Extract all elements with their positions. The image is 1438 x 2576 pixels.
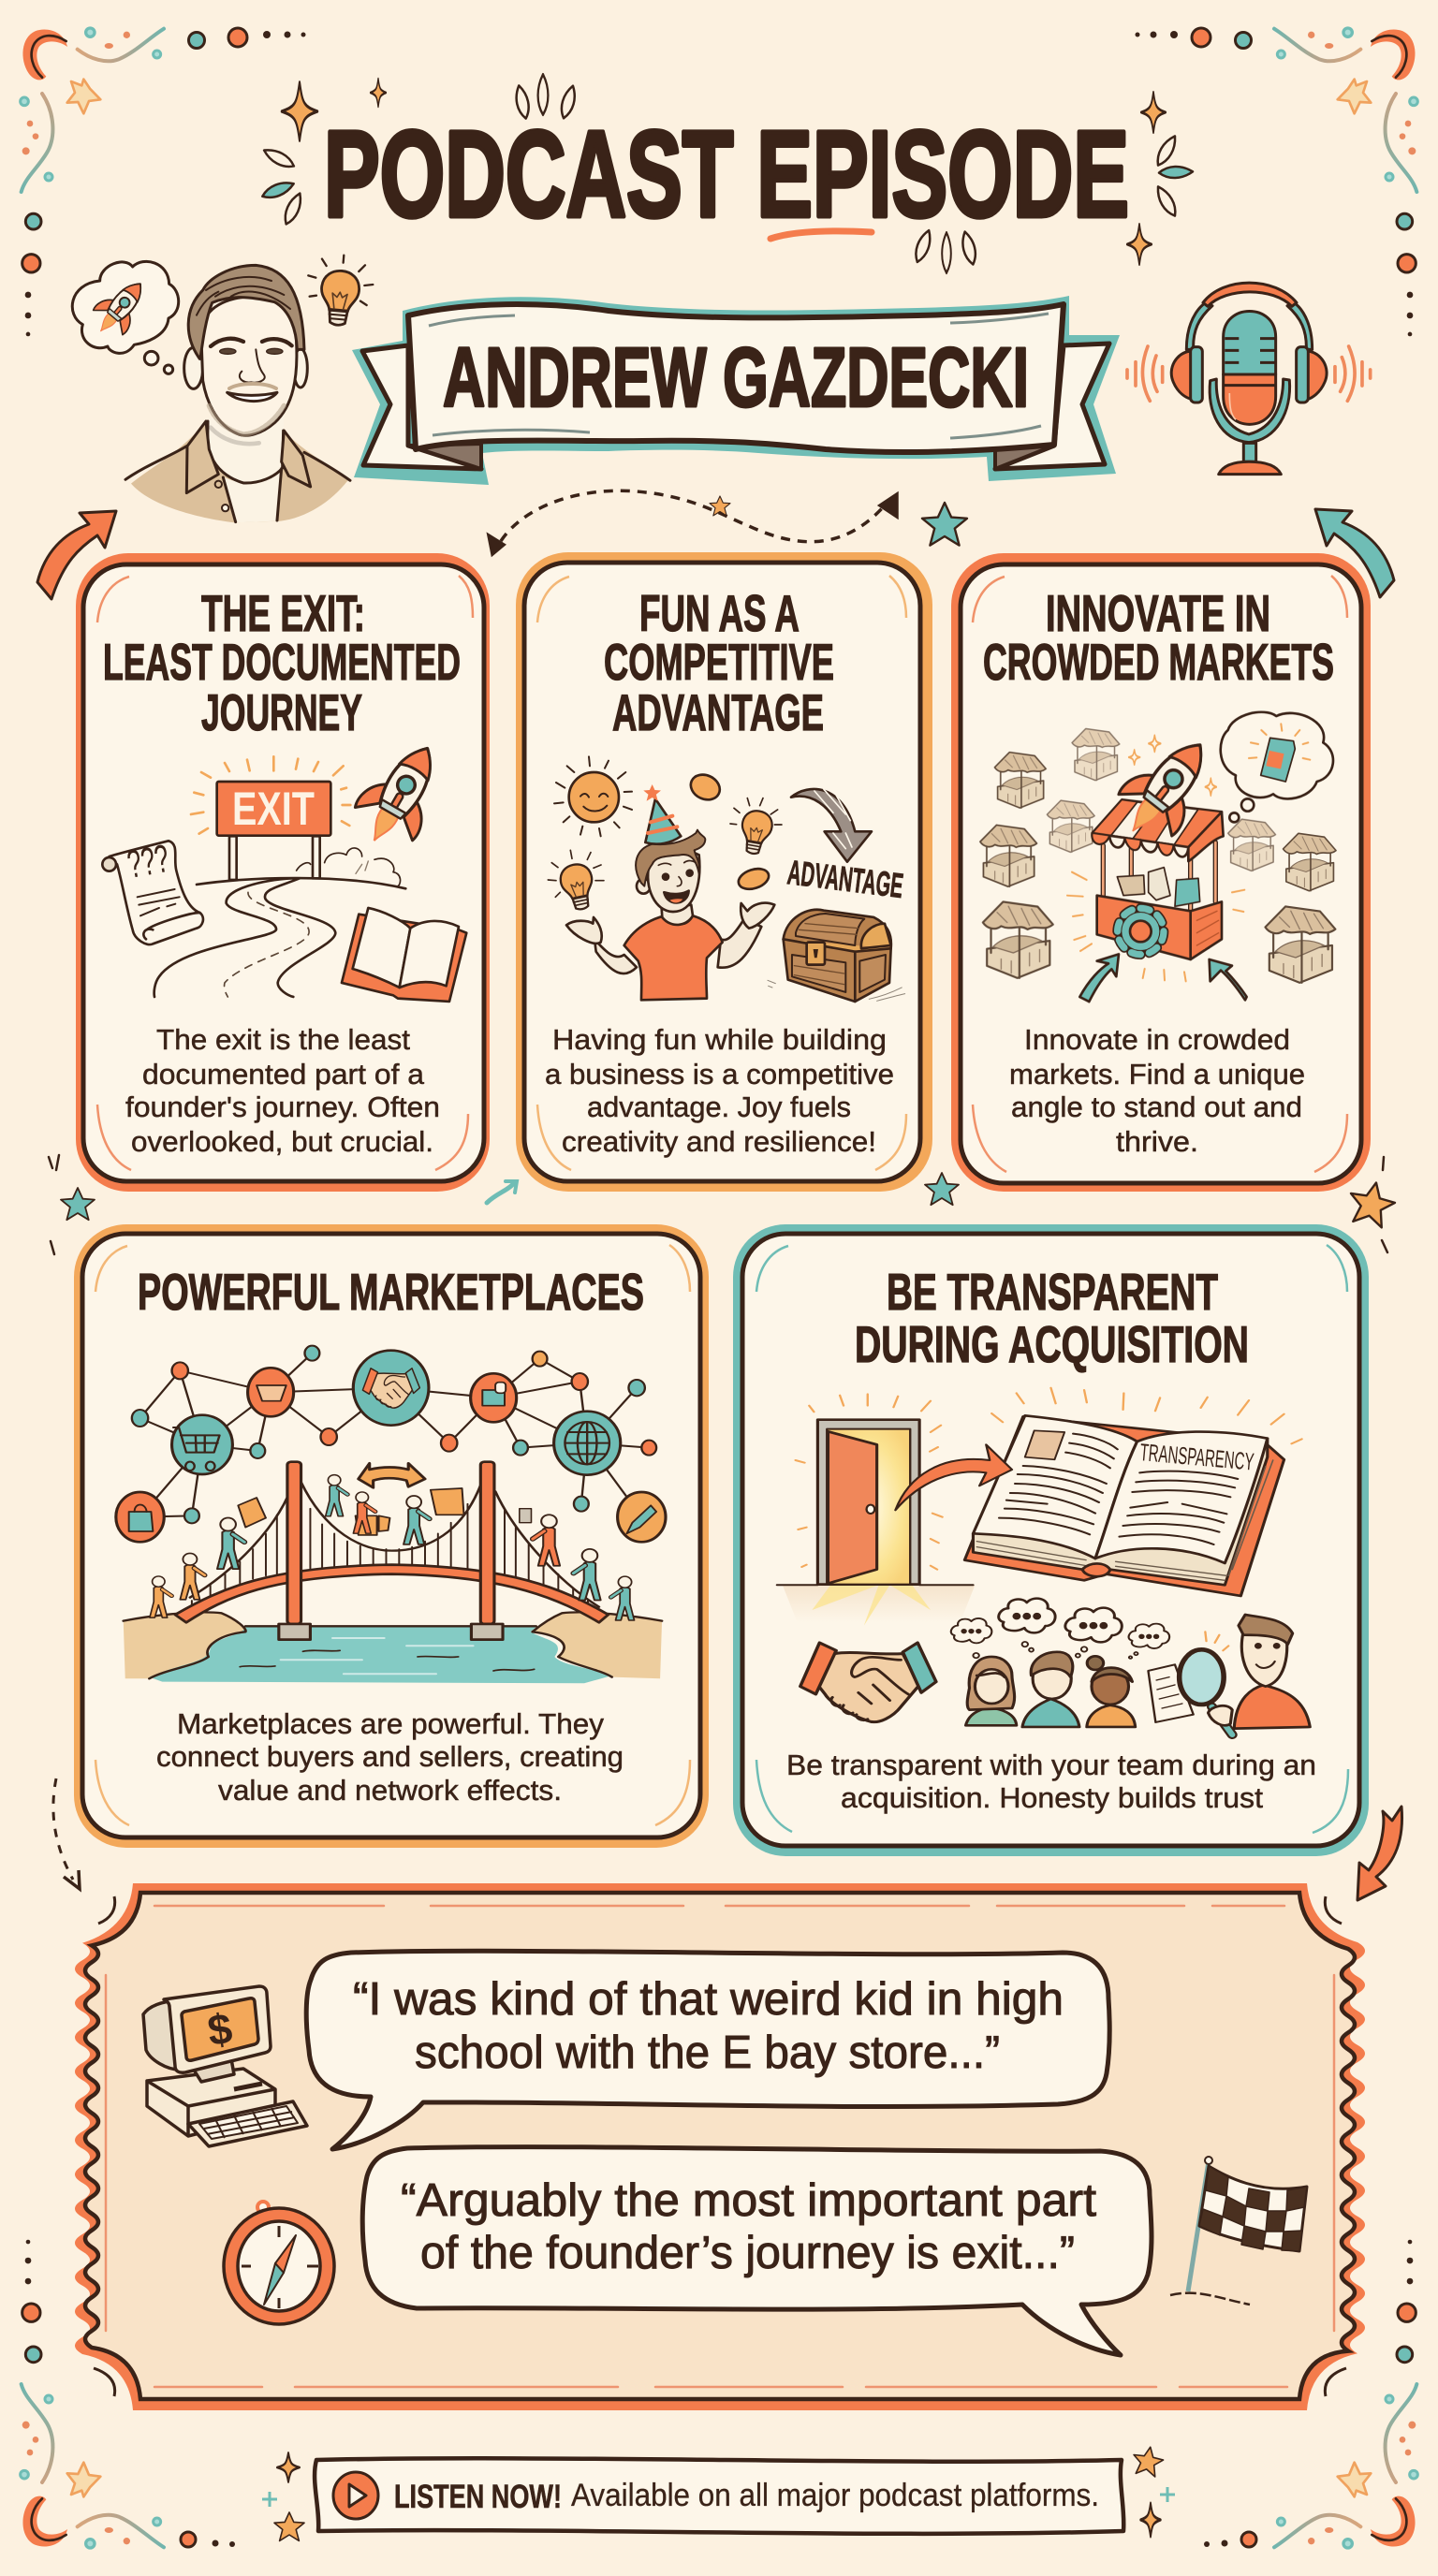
decoration: top-left corner ornament bbox=[21, 28, 164, 336]
heading: JOURNEY bbox=[201, 683, 362, 741]
body text: markets. Find a unique bbox=[1009, 1058, 1305, 1090]
body text: The exit is the least bbox=[156, 1023, 410, 1056]
body text: Having fun while building bbox=[552, 1023, 887, 1056]
quote 1 text: “I was kind of that weird kid in high bbox=[353, 1974, 1064, 2025]
EXIT sign text: EXIT bbox=[232, 783, 315, 835]
body text: overlooked, but crucial. bbox=[131, 1125, 433, 1158]
body text: value and network effects. bbox=[218, 1774, 562, 1807]
panel: quotes bbox=[75, 1883, 1365, 2410]
body text bbox=[125, 1023, 440, 1158]
panel: fun as a competitive advantage bbox=[516, 552, 932, 1192]
heading bbox=[103, 584, 461, 741]
body text: advantage. Joy fuels bbox=[587, 1090, 851, 1123]
quote 2 text bbox=[401, 2175, 1096, 2278]
listen now text: LISTEN NOW! bbox=[394, 2479, 562, 2515]
portrait of Andrew bbox=[125, 265, 350, 522]
heading: FUN AS A bbox=[639, 584, 800, 642]
icon: light bulb bbox=[308, 256, 373, 327]
illustration: open door, book, handshake, team bbox=[777, 1388, 1310, 1734]
quote 2 text: of the founder’s journey is exit...” bbox=[420, 2228, 1075, 2278]
body text bbox=[545, 1023, 894, 1158]
name ribbon banner bbox=[352, 296, 1120, 485]
body text: Be transparent with your team during an bbox=[786, 1749, 1316, 1781]
quote 2 text: “Arguably the most important part bbox=[401, 2175, 1096, 2226]
body text: Marketplaces are powerful. They bbox=[177, 1707, 605, 1740]
panel: the exit bbox=[76, 553, 490, 1192]
panel: innovate in crowded markets bbox=[951, 553, 1371, 1192]
heading: BE TRANSPARENT bbox=[887, 1263, 1218, 1321]
heading: COMPETITIVE bbox=[604, 633, 834, 691]
heading: DURING ACQUISITION bbox=[855, 1315, 1249, 1373]
heading: INNOVATE IN bbox=[1046, 584, 1270, 642]
scroll question marks: ??? bbox=[124, 836, 172, 886]
quote 1 text: school with the E bay store...” bbox=[415, 2027, 1000, 2078]
icon: microphone with headphones bbox=[1127, 283, 1371, 475]
thought bubble with rocket bbox=[72, 261, 179, 373]
decoration: title sparkles and petals bbox=[260, 74, 1193, 273]
speech bubble 2 bbox=[362, 2147, 1152, 2355]
body text: founder's journey. Often bbox=[125, 1090, 440, 1123]
dollar sign: $ bbox=[204, 2003, 235, 2055]
arrow: dashed connector bbox=[489, 490, 897, 554]
panel: be transparent during acquisition bbox=[733, 1224, 1369, 1856]
body text: connect buyers and sellers, creating bbox=[156, 1740, 624, 1773]
heading: THE EXIT: bbox=[201, 584, 365, 642]
icon: checkered flag bbox=[1170, 2157, 1307, 2305]
icon: play button bbox=[333, 2472, 378, 2519]
ADVANTAGE label: ADVANTAGE bbox=[785, 853, 905, 905]
illustration: market stalls bbox=[980, 712, 1336, 1002]
decoration: small stars bbox=[61, 496, 1398, 1229]
body text bbox=[786, 1749, 1316, 1814]
arrow: top left orange bbox=[37, 511, 116, 599]
illustration: exit sign, road, scroll, book, rocket bbox=[102, 756, 466, 1002]
heading bbox=[604, 584, 834, 741]
rocket bbox=[345, 731, 457, 857]
decoration: bottom-left corner ornament bbox=[21, 2240, 164, 2548]
illustration: network above bridge bbox=[116, 1346, 666, 1683]
decoration: bottom row dots bbox=[181, 2532, 1256, 2547]
availability text: Available on all major podcast platforms. bbox=[571, 2478, 1099, 2513]
body text bbox=[1009, 1023, 1305, 1158]
call to action banner bbox=[315, 2458, 1123, 2534]
presenter name: ANDREW GAZDECKI bbox=[443, 331, 1029, 425]
body text: documented part of a bbox=[142, 1058, 425, 1090]
arrow: orange down right bbox=[1357, 1807, 1402, 1900]
decoration: stars around call to action bbox=[262, 2444, 1175, 2540]
body text: angle to stand out and bbox=[1011, 1090, 1302, 1123]
quote 1 text bbox=[353, 1974, 1064, 2078]
decoration: top-right corner ornament bbox=[1274, 28, 1417, 336]
heading bbox=[983, 584, 1334, 691]
decoration: tick marks between panels bbox=[49, 1155, 1387, 1254]
heading: POWERFUL MARKETPLACES bbox=[138, 1263, 644, 1321]
title underline bbox=[770, 231, 872, 239]
body text: thrive. bbox=[1116, 1125, 1198, 1158]
TRANSPARENCY label: TRANSPARENCY bbox=[1138, 1438, 1255, 1476]
decoration: bottom-right corner ornament bbox=[1274, 2240, 1417, 2548]
arrow: top right teal bbox=[1315, 509, 1394, 597]
body text bbox=[156, 1707, 624, 1807]
body text: acquisition. Honesty builds trust bbox=[841, 1781, 1263, 1814]
arrow: dashed down left bbox=[53, 1778, 80, 1889]
illustration: happy founder with sun, bulbs, coins, chest bbox=[548, 756, 905, 1002]
panel: powerful marketplaces bbox=[74, 1224, 709, 1848]
icon: retro computer bbox=[143, 1986, 307, 2146]
body text: a business is a competitive bbox=[545, 1058, 894, 1090]
body text: Innovate in crowded bbox=[1024, 1023, 1290, 1056]
icon: compass bbox=[224, 2202, 334, 2324]
decoration: top row dots bbox=[189, 28, 1251, 49]
heading: ADVANTAGE bbox=[612, 683, 824, 741]
speech bubble 1 bbox=[306, 1951, 1109, 2149]
body text: creativity and resilience! bbox=[562, 1125, 876, 1158]
heading: LEAST DOCUMENTED bbox=[103, 633, 461, 691]
heading bbox=[855, 1263, 1249, 1373]
